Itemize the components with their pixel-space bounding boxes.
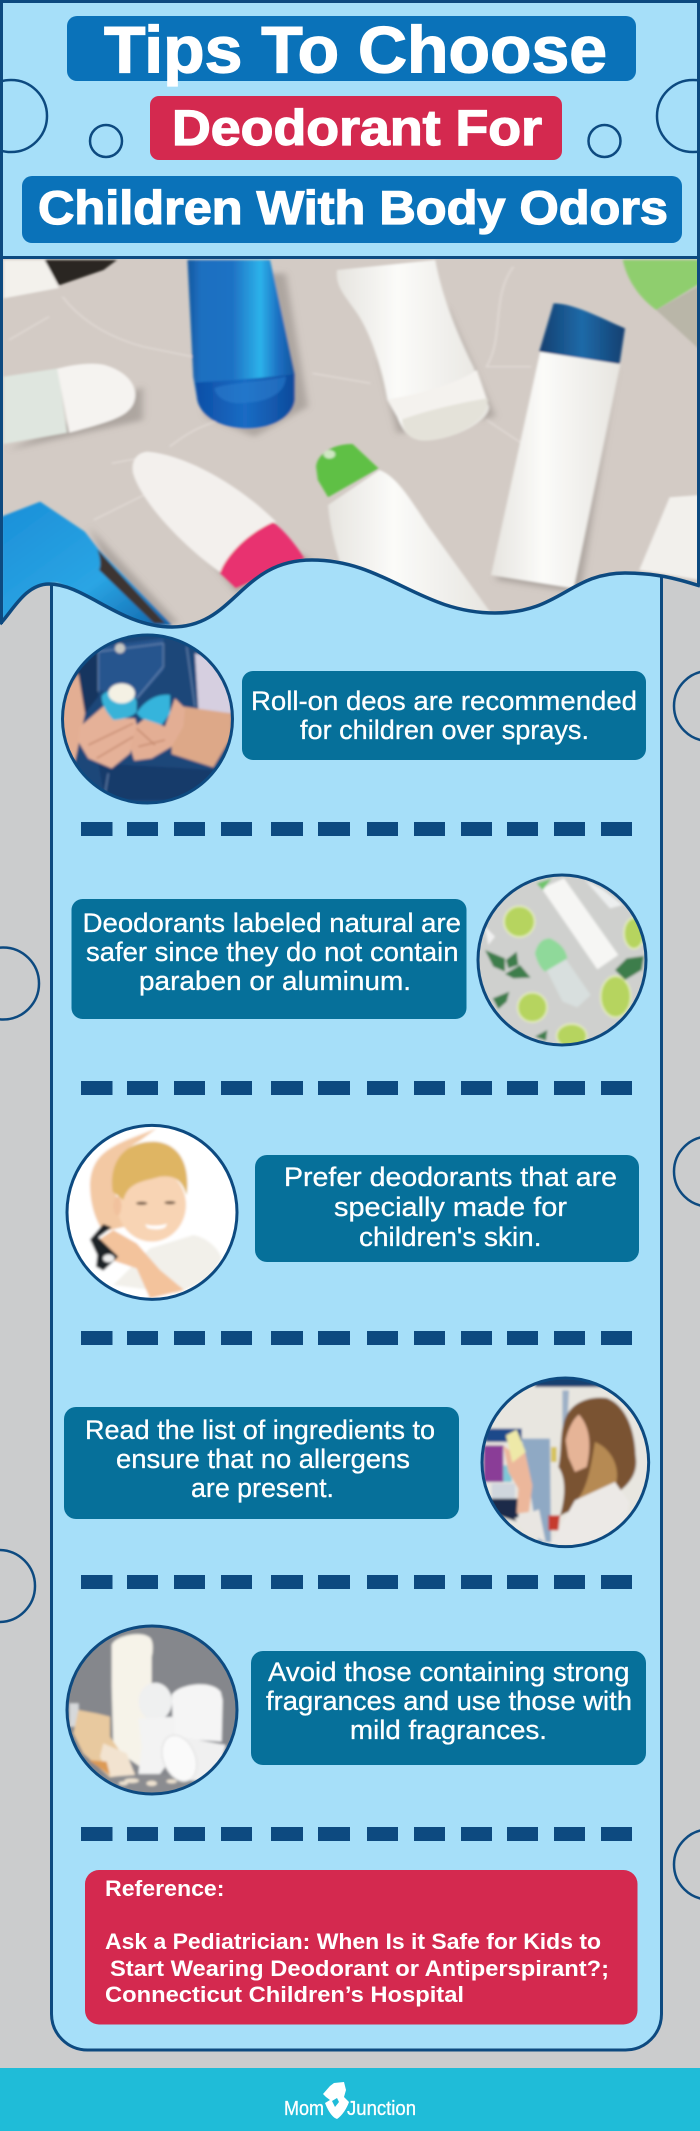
white stick [337, 260, 489, 441]
tip 4 photo: woman reading a product label [480, 1376, 650, 1548]
tip 3 text box [255, 1155, 639, 1262]
title pill: Children With Body Odors: Children With Body Odors [38, 181, 668, 234]
dashed divider 5 [81, 1827, 632, 1841]
tip 4 text box: ensure that no allergens [116, 1444, 410, 1474]
reference box: Start Wearing Deodorant or Antiperspirant?; [110, 1956, 609, 1981]
reference box [85, 1870, 638, 2024]
reference box: Reference: [105, 1876, 224, 1901]
panel: header [0, 2, 700, 258]
tip 4 text box: are present. [191, 1473, 334, 1503]
tip 3 photo: smiling boy applying deodorant [66, 1124, 238, 1301]
dashed divider 1 [81, 822, 632, 836]
tip 3 text box: children's skin. [359, 1222, 542, 1252]
blue bottom-left dispenser [1, 502, 172, 627]
dashed divider 2 [81, 1081, 632, 1095]
top-right green cap [623, 260, 700, 310]
tip 5 photo: white deodorant containers and shells [66, 1624, 238, 1796]
tip 5 text box [251, 1651, 646, 1765]
tall white bottle with navy cap [491, 352, 620, 588]
top-left white bottle [4, 260, 59, 298]
title pill: Tips To Choose: Tips To Choose [104, 12, 607, 86]
dashed divider 3 [81, 1331, 632, 1345]
tip 2 photo: natural deodorants with limes and mint [476, 874, 648, 1046]
panel: main content [52, 480, 662, 2050]
footer band [0, 2068, 700, 2131]
photo: deodorant bottles on marble [0, 259, 700, 639]
dashed divider 4 [81, 1575, 632, 1589]
tip 4 text box [64, 1407, 459, 1519]
left roll-on [4, 368, 67, 444]
tip 3 text box: specially made for [334, 1192, 567, 1222]
green spray can [328, 470, 491, 613]
tip 1 text box: Roll-on deos are recommended [251, 686, 637, 716]
blue bottle [187, 260, 295, 428]
side decoration circles [0, 671, 700, 1900]
tip 1 text box: for children over sprays. [300, 715, 589, 745]
reference box: Connecticut Children’s Hospital [105, 1982, 464, 2007]
pointed roll-on with pink base [133, 452, 276, 573]
tip 5 text box: fragrances and use those with [266, 1686, 632, 1716]
tip 1 photo: child hands holding roll-on balm [61, 634, 234, 804]
shadows [9, 273, 616, 627]
tip 2 text box [72, 899, 466, 1019]
tip 2 text box: paraben or aluminum. [139, 966, 411, 996]
tip 2 text box: Deodorants labeled natural are [83, 908, 461, 938]
logo: MomJunction: Junction [347, 2098, 416, 2120]
tip 5 text box: Avoid those containing strong [268, 1657, 630, 1687]
wave edge [0, 560, 700, 627]
logo: MomJunction: Mom [284, 2098, 324, 2120]
tip 3 text box: Prefer deodorants that are [284, 1162, 617, 1192]
tip 1 text box [242, 671, 646, 760]
tip 5 text box: mild fragrances. [350, 1715, 547, 1745]
bottom-right white bottle [639, 495, 700, 580]
title pill: Deodorant For: Deodorant For [172, 100, 542, 156]
photo edge frame [2, 259, 698, 624]
logo: MomJunction [284, 2082, 416, 2120]
tip 4 text box: Read the list of ingredients to [85, 1415, 435, 1445]
tip 2 text box: safer since they do not contain [86, 937, 458, 967]
reference box: Ask a Pediatrician: When Is it Safe for Kids to [105, 1929, 601, 1954]
